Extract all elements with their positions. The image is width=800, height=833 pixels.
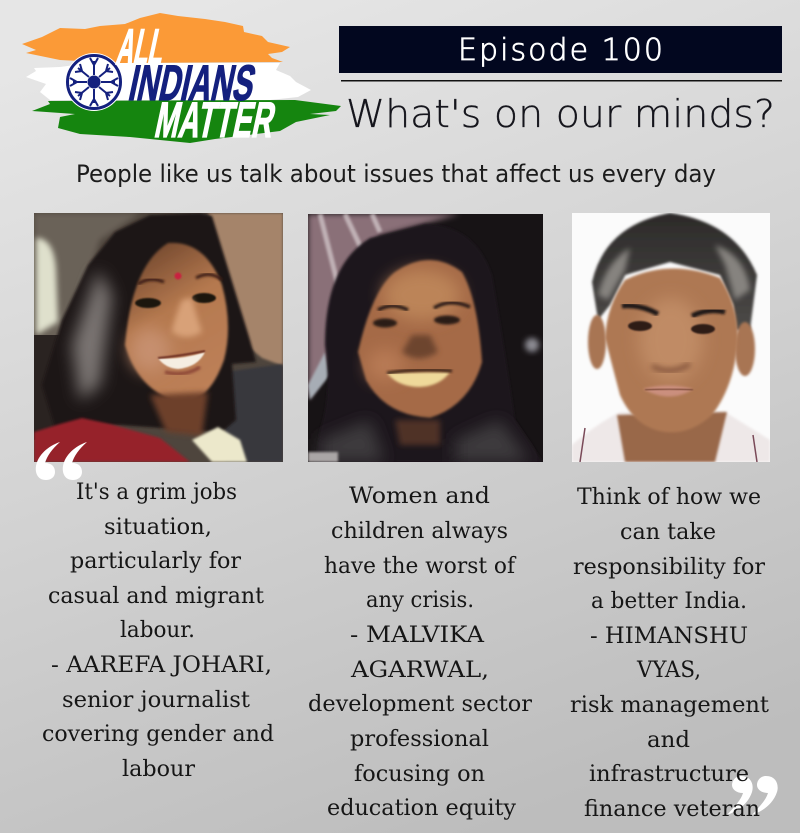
divider line — [341, 80, 782, 82]
logo: green brush stroke — [32, 100, 341, 143]
quote: Himanshu Vyas: and — [647, 728, 690, 753]
photo: Himanshu Vyas — [572, 213, 770, 462]
quote: Malvika Agarwal: Women and — [349, 484, 490, 509]
quote: Himanshu Vyas: finance veteran — [584, 797, 760, 822]
quote: Malvika Agarwal: any crisis. — [366, 588, 474, 613]
photo: Aarefa Johari — [34, 213, 283, 462]
quote: Aarefa Johari: senior journalist — [62, 688, 250, 713]
quote: Himanshu Vyas: a better India. — [591, 589, 747, 614]
logo: MATTER: MATTER — [151, 92, 281, 148]
icon: opening quotation mark — [36, 442, 87, 480]
quote: Himanshu Vyas: infrastructure — [589, 762, 749, 787]
logo: INDIANS: INDIANS — [125, 55, 261, 111]
quote: Malvika Agarwal: children always — [331, 519, 508, 544]
quote: Himanshu Vyas: responsibility for — [573, 555, 765, 580]
subheading: People like us talk about issues that affect us every day — [76, 160, 716, 188]
quote: Malvika Agarwal: education equity — [327, 796, 517, 821]
episode banner — [339, 26, 782, 73]
logo: saffron brush stroke — [22, 13, 290, 63]
quote: Himanshu Vyas: risk management — [570, 693, 769, 718]
quote: Malvika Agarwal: development sector — [308, 692, 532, 717]
quote: Aarefa Johari: particularly for — [70, 549, 241, 574]
logo: wheel emblem — [65, 53, 123, 111]
quote: Himanshu Vyas: VYAS, — [636, 658, 701, 683]
quote: Aarefa Johari: casual and migrant — [48, 584, 264, 609]
quote: Aarefa Johari: - AAREFA JOHARI, — [51, 653, 272, 678]
logo: white brush stroke — [26, 63, 311, 100]
logo: All Indians Matter — [22, 13, 341, 148]
quote: Malvika Agarwal: focusing on — [354, 762, 485, 787]
episode banner: Episode 100 — [458, 33, 663, 68]
quote: Malvika Agarwal — [308, 484, 532, 821]
photo: Malvika Agarwal — [308, 214, 543, 462]
heading: What's on our minds? — [346, 92, 775, 137]
quote: Aarefa Johari — [42, 480, 274, 782]
quote: Malvika Agarwal: have the worst of — [324, 554, 517, 579]
quote: Himanshu Vyas — [570, 485, 769, 822]
quote: Himanshu Vyas: - HIMANSHU — [590, 624, 748, 649]
logo: ALL: ALL — [113, 19, 171, 75]
quote: Malvika Agarwal: AGARWAL, — [350, 658, 489, 683]
quote: Malvika Agarwal: professional — [350, 727, 489, 752]
quote: Aarefa Johari: situation, — [104, 515, 212, 540]
quote: Aarefa Johari: It's a grim jobs — [76, 480, 237, 505]
quote: Malvika Agarwal: - MALVIKA — [350, 623, 485, 648]
quote: Aarefa Johari: covering gender and — [42, 722, 274, 747]
quote: Himanshu Vyas: can take — [620, 520, 716, 545]
icon: closing quotation mark — [727, 776, 778, 815]
quote: Aarefa Johari: labour. — [120, 618, 195, 643]
quote: Aarefa Johari: labour — [122, 757, 195, 782]
quote: Himanshu Vyas: Think of how we — [577, 485, 761, 510]
